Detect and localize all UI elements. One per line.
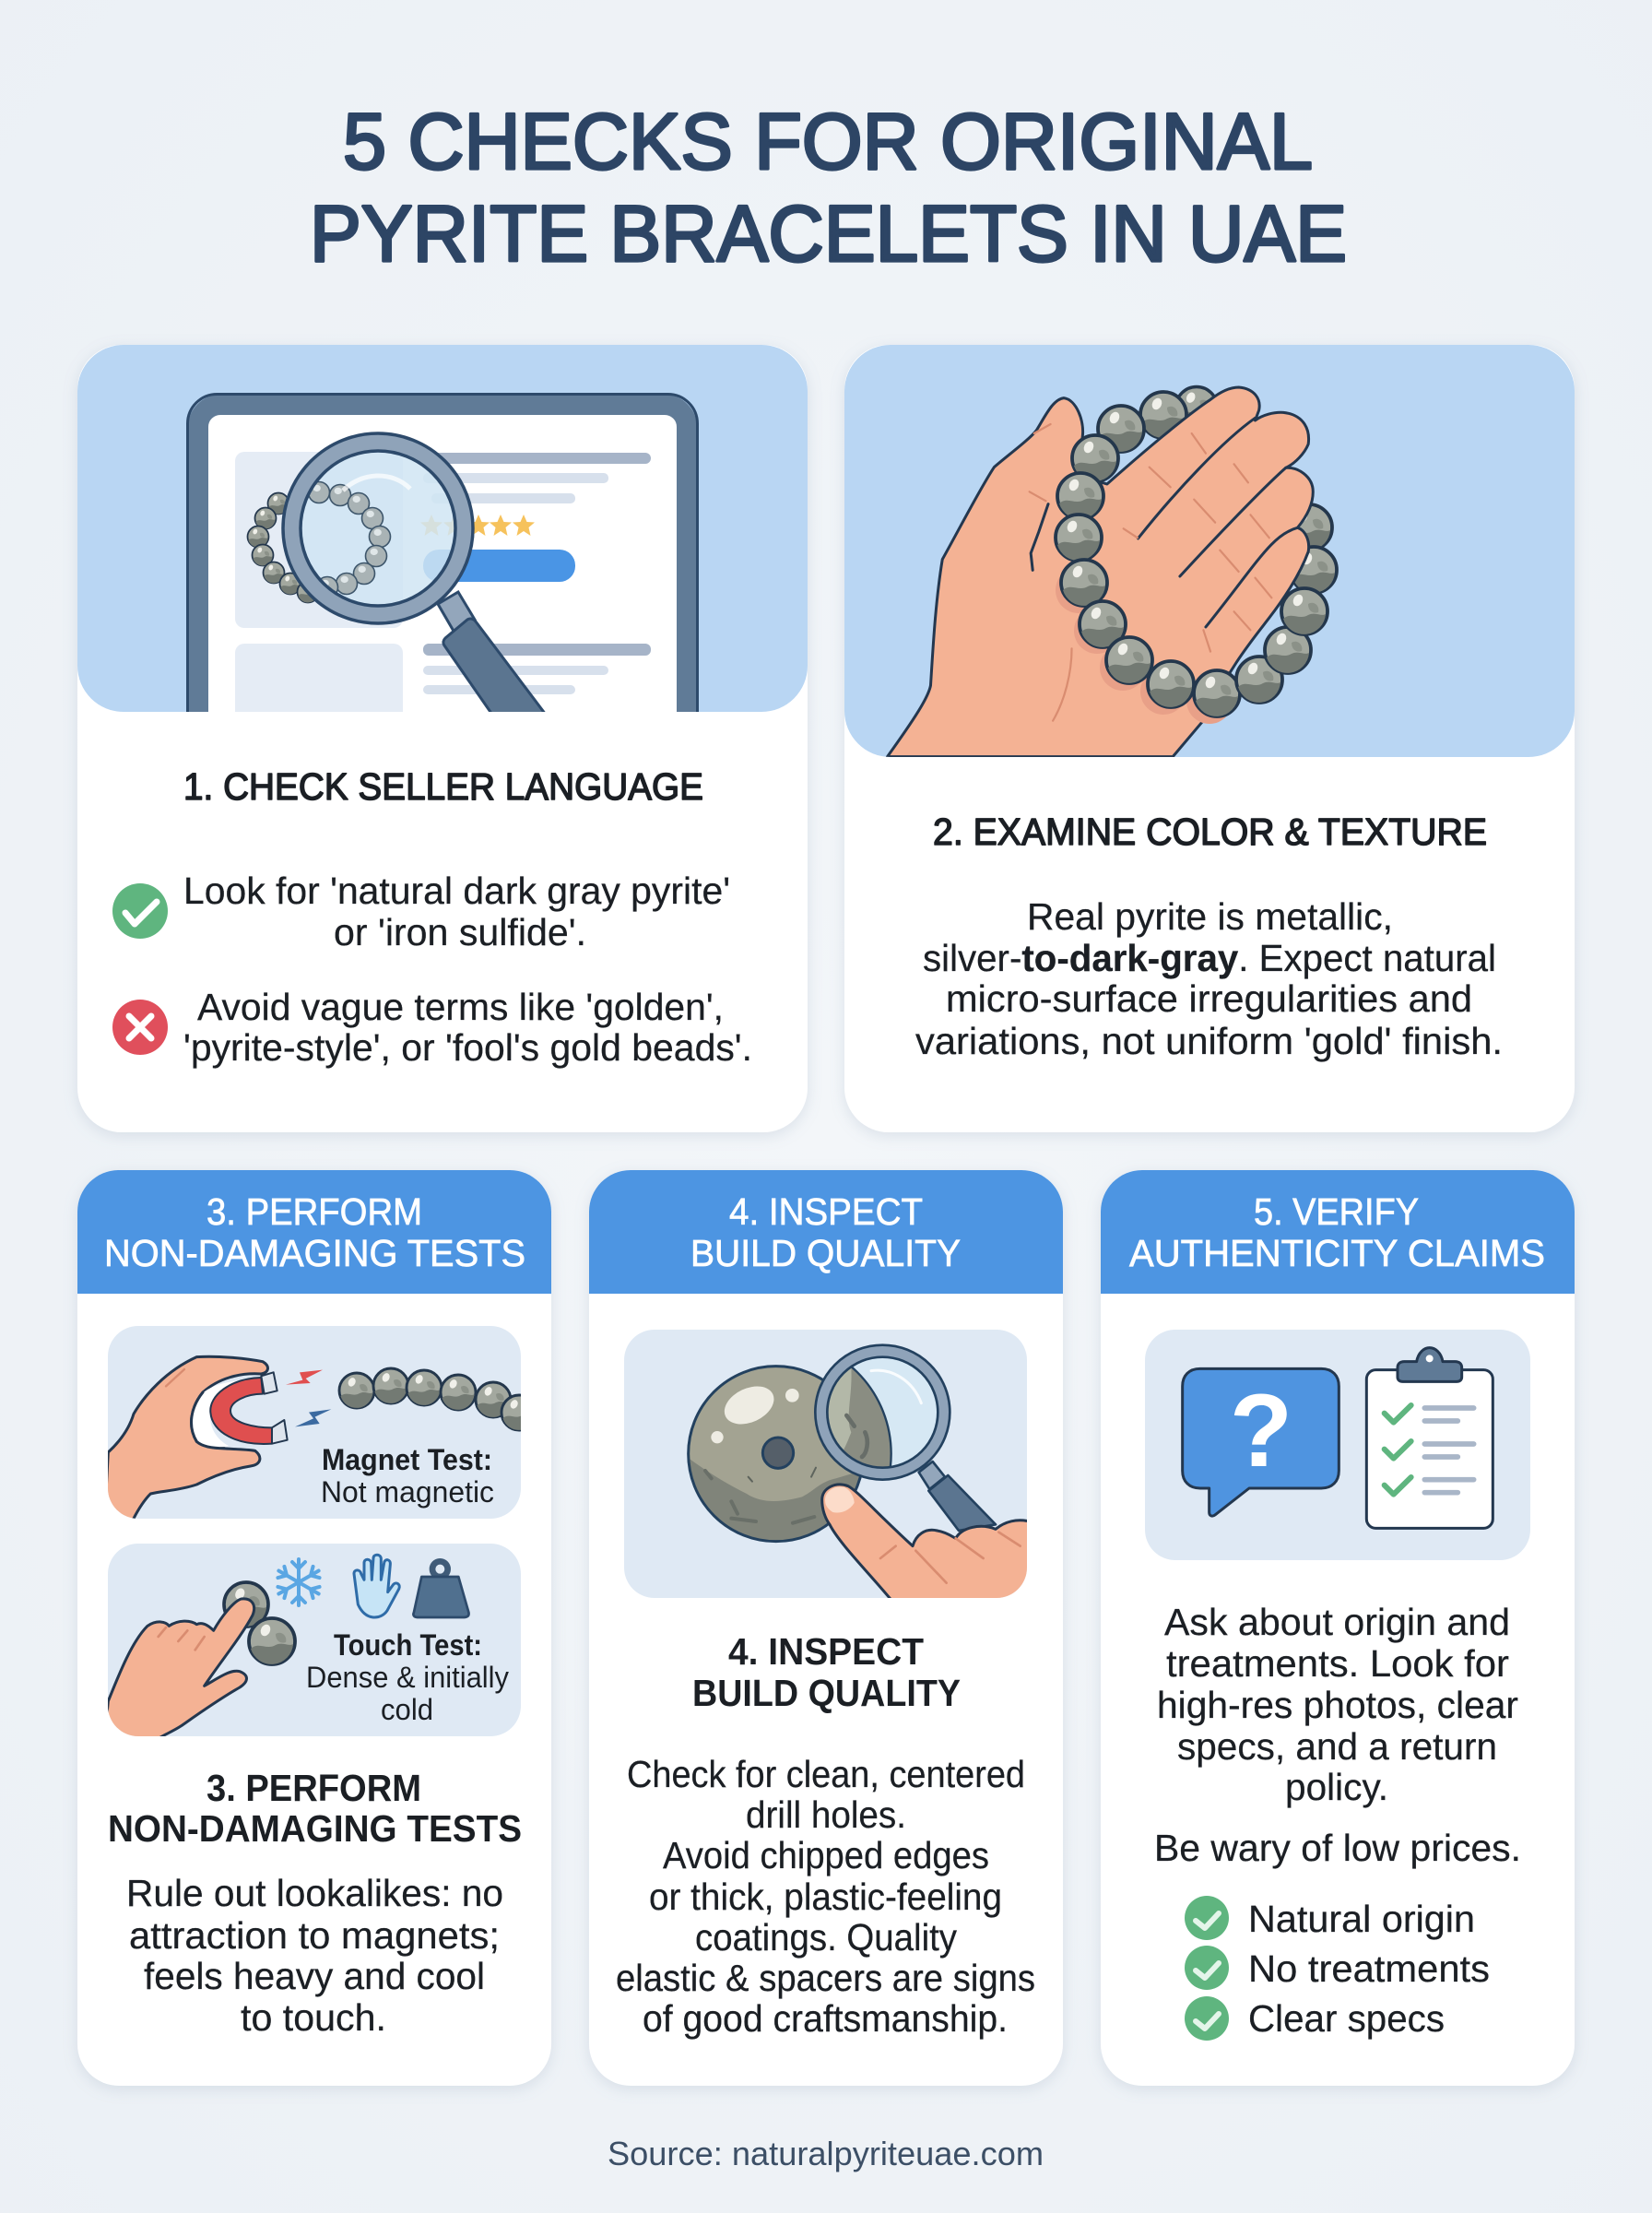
text: description: of good craftsmanship. <box>643 1997 1008 2040</box>
illustration: product page under magnifier <box>77 345 808 745</box>
text: description: policy. <box>1285 1766 1388 1808</box>
header band: BUILD QUALITY <box>690 1232 961 1274</box>
touch test label: Touch Test: <box>334 1628 482 1662</box>
header band: NON-DAMAGING TESTS <box>104 1232 525 1274</box>
item: natural origin: Natural origin <box>1248 1898 1475 1940</box>
header band: 4. INSPECT <box>729 1190 923 1233</box>
header band: 3. PERFORM <box>206 1190 422 1233</box>
text: description: Avoid chipped edges <box>663 1834 989 1876</box>
illustration: bead under magnifier with finger <box>624 1330 1030 1600</box>
illustration: hand holding bracelet <box>844 345 1575 757</box>
text: description: elastic & spacers are signs <box>616 1957 1035 1999</box>
text: description: attraction to magnets; <box>129 1914 500 1957</box>
header band <box>1101 1170 1575 1294</box>
text: avoid <box>183 986 752 1069</box>
text: description <box>616 1753 1035 2040</box>
icon: green check <box>112 883 168 939</box>
text: description <box>915 895 1503 1062</box>
panel: 1. check seller language <box>77 345 808 1132</box>
item: clear specs: Clear specs <box>1248 1997 1445 2040</box>
heading: 3. PERFORM <box>206 1767 421 1809</box>
text: description: Rule out lookalikes: no <box>126 1872 503 1914</box>
text: description: Ask about origin and <box>1164 1601 1510 1643</box>
text: description: or thick, plastic-feeling <box>649 1876 1002 1918</box>
card background <box>589 1170 1063 2086</box>
text: description: drill holes. <box>746 1793 906 1836</box>
text: description: Real pyrite is metallic, <box>1027 895 1393 938</box>
card background <box>77 345 808 1132</box>
heading: 2. EXAMINE COLOR & TEXTURE <box>933 811 1487 853</box>
text: description: to touch. <box>241 1996 386 2039</box>
text: description: feels heavy and cool <box>144 1955 485 1997</box>
text: look for <box>183 870 730 953</box>
text: description <box>1154 1601 1521 1869</box>
touch test panel <box>104 1544 521 1740</box>
text: avoid: Avoid vague terms like 'golden', <box>197 986 724 1028</box>
text: description: silver-to-dark-gray. Expect natural <box>923 937 1496 979</box>
header band: AUTHENTICITY CLAIMS <box>1129 1232 1545 1274</box>
touch test label: cold <box>381 1693 433 1726</box>
text: description: micro-surface irregularities and <box>946 977 1472 1020</box>
heading <box>108 1767 522 1850</box>
header band <box>589 1170 1063 1294</box>
card background <box>77 1170 551 2086</box>
illustration: finger touching beads <box>104 1582 295 1740</box>
touch test label: Dense & initially <box>306 1661 509 1694</box>
title <box>310 98 1347 278</box>
touch test label <box>306 1628 509 1726</box>
panel: 4. inspect build quality <box>589 1170 1063 2086</box>
illustration: hand with magnet and beads <box>104 1356 537 1521</box>
icon: snowflake <box>276 1559 322 1605</box>
icon: clipboard checklist <box>1366 1348 1493 1528</box>
heading: 1. CHECK SELLER LANGUAGE <box>183 765 703 808</box>
heading <box>692 1630 961 1714</box>
illustration panel <box>1145 1330 1530 1560</box>
card background <box>844 345 1575 1132</box>
title: PYRITE BRACELETS IN UAE <box>310 190 1347 278</box>
panel: 2. examine color and texture <box>844 345 1575 1132</box>
text: description: Be wary of low prices. <box>1154 1827 1521 1869</box>
panel: 5. verify authenticity claims <box>1101 1170 1575 2086</box>
magnet test panel <box>104 1326 537 1521</box>
text: description: specs, and a return <box>1177 1725 1497 1768</box>
icon: open hand <box>354 1555 399 1617</box>
icon: question speech bubble <box>1183 1368 1339 1516</box>
text: description: variations, not uniform 'gold' finish. <box>915 1020 1503 1062</box>
text: description: high-res photos, clear <box>1157 1684 1518 1726</box>
icon: question speech bubble: ? <box>1230 1373 1292 1488</box>
header band <box>77 1170 551 1294</box>
text: description <box>126 1872 503 2039</box>
text: avoid: 'pyrite-style', or 'fool's gold beads'. <box>183 1026 752 1069</box>
header band: 5. VERIFY <box>1254 1190 1419 1233</box>
text: description: treatments. Look for <box>1166 1642 1509 1685</box>
icon: weight <box>413 1561 469 1617</box>
heading: 4. INSPECT <box>728 1630 924 1673</box>
title: 5 CHECKS FOR ORIGINAL <box>343 98 1313 186</box>
source line: Source: naturalpyriteuae.com <box>608 2135 1044 2172</box>
magnet test label <box>321 1443 494 1509</box>
text: look for: Look for 'natural dark gray pyrite' <box>183 870 730 912</box>
checklist <box>1185 1896 1490 2041</box>
icon: red cross <box>112 1000 168 1055</box>
magnet test label: Not magnetic <box>321 1475 494 1509</box>
heading: NON-DAMAGING TESTS <box>108 1807 522 1850</box>
magnet test label: Magnet Test: <box>322 1443 492 1476</box>
card background <box>1101 1170 1575 2086</box>
text: look for: or 'iron sulfide'. <box>334 911 586 953</box>
heading: BUILD QUALITY <box>692 1672 961 1714</box>
text: description: Check for clean, centered <box>627 1753 1025 1795</box>
panel: 3. perform non-damaging tests <box>77 1170 551 2086</box>
item: no treatments: No treatments <box>1248 1947 1490 1990</box>
text: description: coatings. Quality <box>695 1916 957 1959</box>
